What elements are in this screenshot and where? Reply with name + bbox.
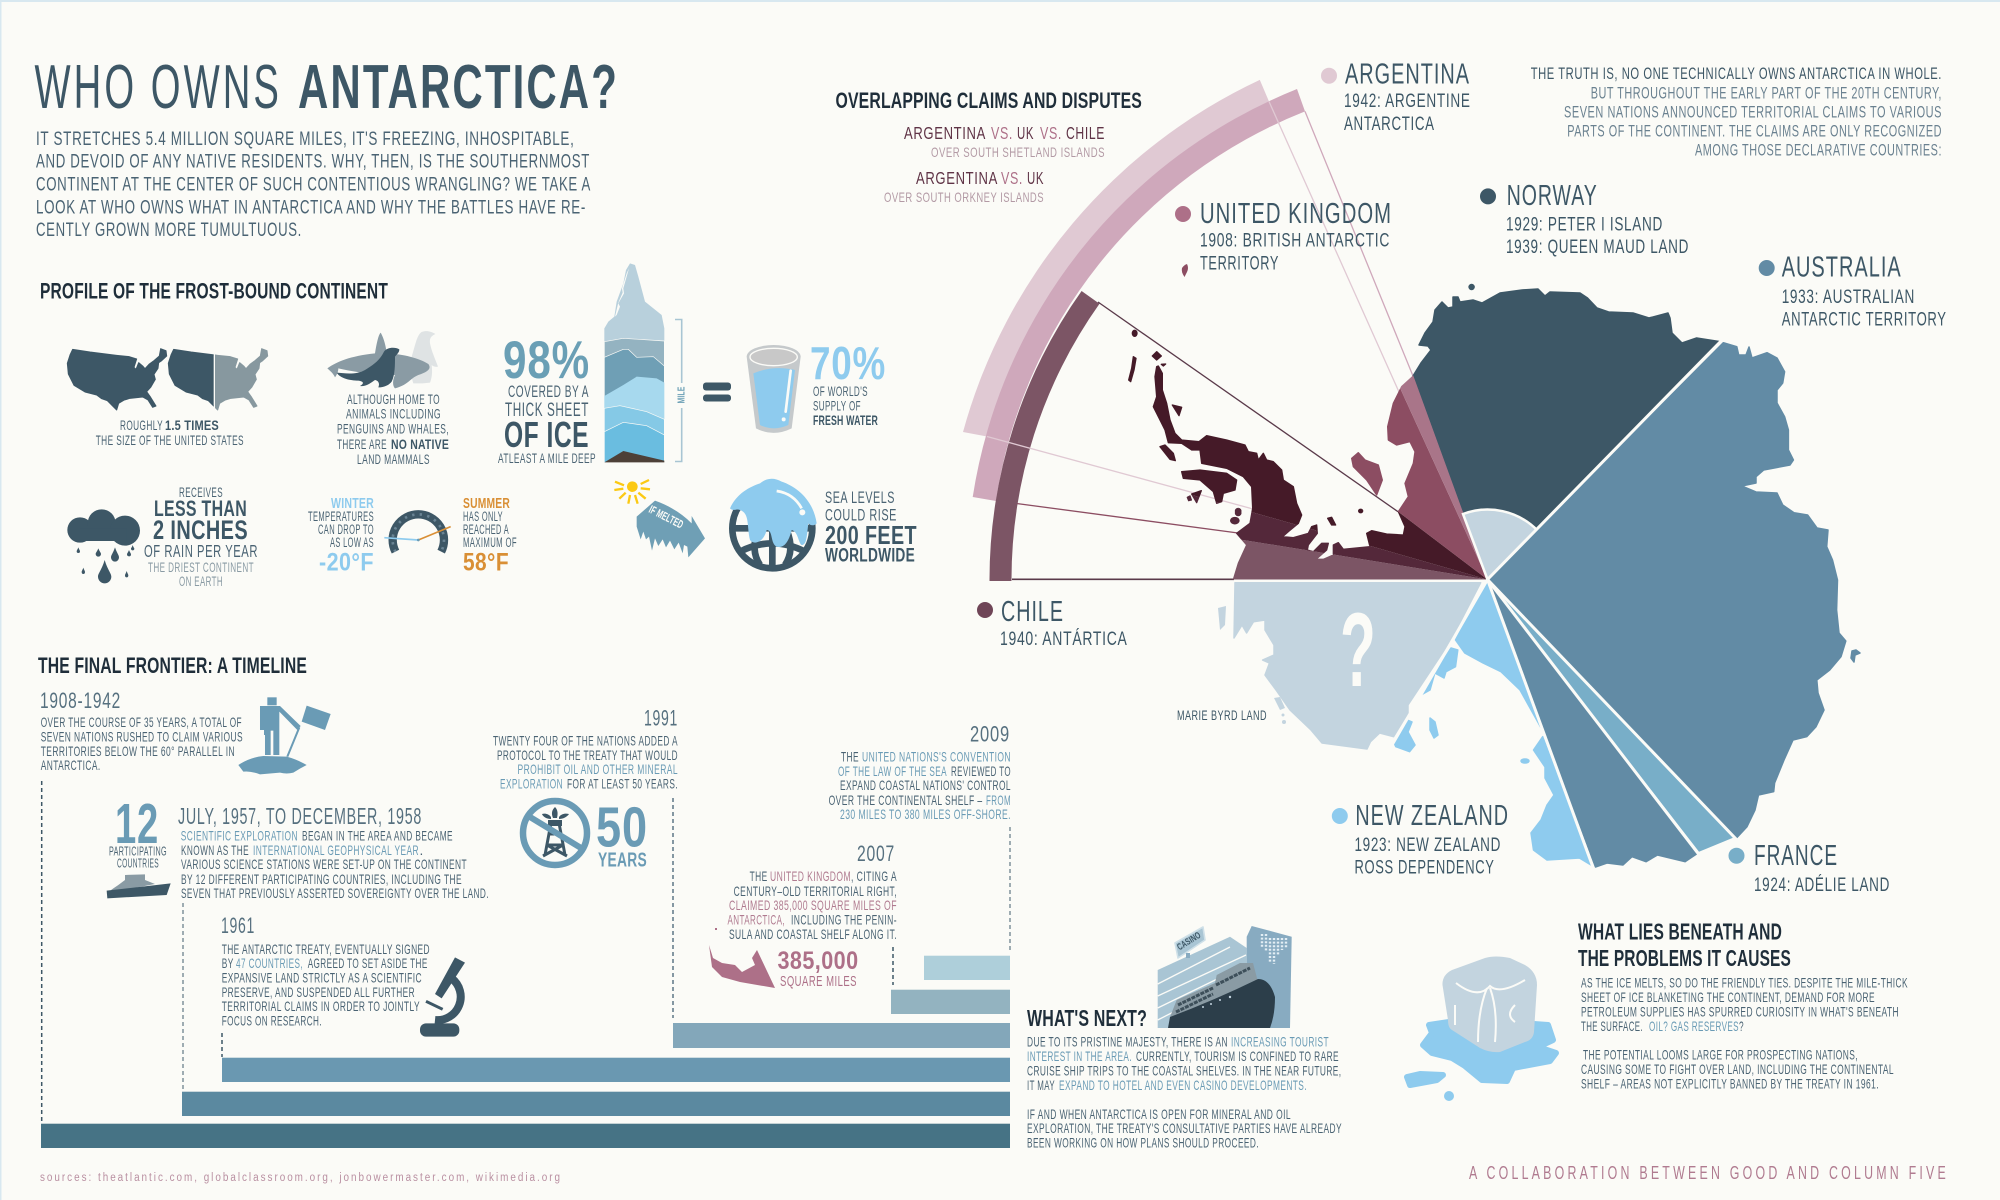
icon: explorer with flag: [238, 697, 331, 774]
stat: 385,000 square miles: [778, 947, 858, 990]
label: Australia: 1933: AUSTRALIAN: [1782, 286, 1915, 308]
dispute: south shetland: [904, 123, 1105, 160]
timeline: 2007: [709, 841, 897, 990]
body text: IF AND WHEN ANTARCTICA IS OPEN FOR MINERAL AND OIL: [1027, 1107, 1291, 1122]
panel: no native land mammals: [327, 331, 449, 467]
heading: timeline: THE FINAL FRONTIER: A TIMELINE: [38, 653, 307, 678]
label: United Kingdom: [1175, 198, 1392, 275]
sea level caption: WORLDWIDE: [825, 545, 915, 567]
body text: CRUISE SHIP TRIPS TO THE COASTAL SHELVES. IN THE NEAR FUTURE,: [1027, 1064, 1342, 1079]
intro text block: [36, 129, 591, 241]
water stat text: 70%: [810, 337, 886, 389]
water stat text: OF WORLD'S: [813, 383, 868, 399]
body text: EXPANSIVE LAND STRICTLY AS A SCIENTIFIC: [222, 971, 422, 986]
ice stat text: OF ICE: [504, 414, 589, 455]
body text: OVER THE CONTINENTAL SHELF –: [829, 793, 983, 808]
body text: [1581, 976, 1908, 1092]
icon: microscope: [420, 957, 465, 1037]
water stat text: SUPPLY OF: [813, 398, 861, 414]
label: New Zealand: 1923: NEW ZEALAND: [1354, 834, 1501, 856]
heading: overlapping claims: OVERLAPPING CLAIMS AND DISPUTES: [836, 88, 1142, 113]
illustration: casino and cruise ship: CASINO: [1175, 930, 1203, 953]
icon: melting ice cube: [1407, 956, 1556, 1101]
summer text: SUMMER: [463, 495, 510, 512]
body text: INCLUDING THE PENIN-: [791, 913, 897, 928]
body text: SULA AND COASTAL SHELF ALONG IT.: [729, 927, 897, 942]
winter text: TEMPERATURES: [308, 509, 374, 524]
summer text: REACHED A: [463, 522, 509, 537]
label: Argentina: ARGENTINA: [1345, 59, 1470, 91]
heading: what lies beneath: THE PROBLEMS IT CAUSES: [1578, 945, 1791, 971]
chart: claim arcs: [963, 80, 1413, 581]
label: Argentina: [1321, 59, 1471, 135]
dispute: south shetland: ARGENTINA: [904, 123, 986, 143]
size caption: THE SIZE OF THE UNITED STATES: [96, 432, 244, 448]
body text: EXPLORATION, THE TREATY'S CONSULTATIVE PARTIES HAVE ALREADY: [1027, 1121, 1342, 1136]
label: New Zealand: ROSS DEPENDENCY: [1354, 856, 1494, 878]
dispute: south shetland: CHILE: [1066, 123, 1105, 143]
intro text block: CENTLY GROWN MORE TUMULTUOUS.: [36, 220, 302, 241]
body text: EXPAND COASTAL NATIONS' CONTROL: [840, 778, 1011, 793]
label: Marie Byrd Land: MARIE BYRD LAND: [1177, 708, 1267, 723]
mammals caption: NO NATIVE: [391, 436, 449, 452]
size caption: [96, 417, 244, 448]
body text: [222, 942, 430, 1029]
rainfall caption: 2 INCHES: [153, 515, 248, 545]
timeline bars: [41, 956, 1010, 1148]
label: Norway: 1939: QUEEN MAUD LAND: [1506, 236, 1689, 258]
body text: BEEN WORKING ON HOW PLANS SHOULD PROCEED.: [1027, 1136, 1259, 1151]
mammals caption: ALTHOUGH HOME TO: [347, 391, 440, 407]
body text: THE: [750, 869, 768, 884]
panel: if melted: [614, 479, 917, 568]
timeline: 1957-1958: [107, 792, 489, 901]
body text: OIL? GAS RESERVES: [1649, 1019, 1739, 1034]
body text: CENTURY–OLD TERRITORIAL RIGHT,: [734, 884, 897, 899]
map: Antarctica sectors: [1129, 264, 1860, 870]
label: Chile: CHILE: [1001, 596, 1064, 628]
arc: United Kingdom: [973, 89, 1305, 501]
intro text block: LOOK AT WHO OWNS WHAT IN ANTARCTICA AND WHY THE BATTLES HAVE RE-: [36, 197, 586, 218]
ice stat text: 98%: [503, 331, 590, 390]
mammals caption: ANIMALS INCLUDING: [346, 406, 441, 422]
panel: what's next: [1027, 926, 1342, 1151]
icon: UK claim map: [709, 928, 775, 988]
mammals caption: LAND MAMMALS: [357, 451, 430, 467]
sector: Australia: [1488, 343, 1860, 867]
body text: CURRENTLY, TOURISM IS CONFINED TO RARE: [1136, 1049, 1339, 1064]
intro text block: CONTINENT AT THE CENTER OF SUCH CONTENTIOUS WRANGLING? WE TAKE A: [36, 175, 591, 196]
icon: rain cloud: [67, 509, 140, 583]
timeline: 1961: 1961: [221, 913, 255, 938]
timeline: 2009: [829, 722, 1011, 822]
label: Australia: AUSTRALIA: [1782, 252, 1902, 284]
body text: ANTARCTICA.: [41, 758, 101, 773]
stat: 12 countries: 12: [115, 792, 159, 856]
label: New Zealand: [1332, 800, 1509, 878]
timeline: 1961: [221, 913, 465, 1037]
timeline: 1991: [493, 706, 678, 872]
label: United Kingdom: TERRITORY: [1200, 253, 1279, 275]
panel: ice coverage: [498, 263, 886, 466]
body text: OVER THE COURSE OF 35 YEARS, A TOTAL OF: [41, 715, 242, 730]
body text: AGREED TO SET ASIDE THE: [308, 956, 428, 971]
body text: SEVEN NATIONS RUSHED TO CLAIM VARIOUS: [41, 730, 243, 745]
label: Chile: [977, 596, 1128, 650]
icon: orca, seal, penguin: [327, 331, 438, 388]
winter text: -20°F: [319, 549, 374, 577]
water stat text: [810, 337, 886, 428]
title: ANTARCTICA?: [298, 53, 619, 122]
body text: OF THE LAW OF THE SEA: [838, 764, 947, 779]
rainfall caption: THE DRIEST CONTINENT: [148, 559, 254, 575]
body text: THE ANTARCTIC TREATY, EVENTUALLY SIGNED: [222, 942, 430, 957]
label: Norway: NORWAY: [1507, 180, 1598, 212]
text block: the truth: [1531, 64, 1942, 160]
body text: INTEREST IN THE AREA.: [1027, 1049, 1132, 1064]
body text: TWENTY FOUR OF THE NATIONS ADDED A: [493, 734, 678, 749]
stat: 385,000 square miles: SQUARE MILES: [780, 973, 857, 990]
timeline dashed connectors: [42, 781, 1010, 1123]
sources: sources: theatlantic.com, globalclassroom.org, jonbowermaster.com, wikimedia.org: [40, 1172, 562, 1184]
dispute: south orkney: ARGENTINA: [916, 168, 998, 188]
body text: PRESERVE, AND SUSPENDED ALL FURTHER: [222, 985, 415, 1000]
body text: EXPLORATION: [500, 777, 563, 792]
body text: FROM: [986, 793, 1011, 808]
dispute: south shetland: VS.: [1040, 123, 1062, 143]
timeline: 1957-1958: JULY, 1957, TO DECEMBER, 1958: [178, 803, 422, 829]
body text: SEVEN THAT PREVIOUSLY ASSERTED SOVEREIGNTY OVER THE LAND.: [181, 886, 489, 901]
body text: TERRITORIAL CLAIMS IN ORDER TO JOINTLY: [222, 999, 420, 1014]
dispute: south shetland: OVER SOUTH SHETLAND ISLANDS: [931, 144, 1105, 160]
body text: INTERNATIONAL GEOPHYSICAL YEAR: [253, 843, 419, 858]
sea level caption: COULD RISE: [825, 506, 897, 525]
question mark: ?: [1340, 592, 1377, 709]
mammals caption: THERE ARE: [337, 436, 387, 452]
intro text block: AND DEVOID OF ANY NATIVE RESIDENTS. WHY, THEN, IS THE SOUTHERNMOST: [36, 152, 590, 173]
label: Chile: 1940: ANTÁRTICA: [1000, 627, 1128, 650]
claim boundary lines: [987, 102, 1413, 579]
dispute: south orkney: [884, 168, 1044, 205]
timeline: 1991: 1991: [644, 706, 678, 731]
title: WHO OWNS: [34, 53, 282, 122]
sector divider lines: [1392, 340, 1737, 870]
label: France: [1728, 840, 1890, 896]
body text: PROHIBIT OIL AND OTHER MINERAL: [518, 762, 678, 777]
body text: 230 MILES TO 380 MILES OFF-SHORE.: [840, 807, 1011, 822]
sea level caption: [825, 488, 917, 567]
icon: no oil derrick: [523, 801, 587, 865]
stat: 12 countries: [109, 792, 167, 871]
label: United Kingdom: 1908: BRITISH ANTARCTIC: [1200, 229, 1390, 251]
body text: BEGAN IN THE AREA AND BECAME: [302, 829, 453, 844]
body text: [829, 750, 1011, 822]
label: Norway: 1929: PETER I ISLAND: [1506, 214, 1663, 236]
rainfall caption: ON EARTH: [179, 573, 223, 589]
body text: INCREASING TOURIST: [1231, 1035, 1329, 1050]
body text: THE SURFACE.: [1581, 1019, 1643, 1034]
water stat text: FRESH WATER: [813, 412, 878, 428]
body text: [181, 829, 489, 901]
mammals caption: PENGUINS AND WHALES,: [337, 420, 449, 436]
dispute: south orkney: OVER SOUTH ORKNEY ISLANDS: [884, 189, 1044, 205]
icon: water glass: [747, 345, 801, 433]
island: South Georgia: [1182, 264, 1188, 277]
icon: melting globe: [730, 479, 817, 568]
body text: FOR AT LEAST 50 YEARS.: [567, 777, 678, 792]
body text: UNITED NATIONS'S CONVENTION: [862, 750, 1011, 765]
stat: 50 years: 50: [596, 796, 648, 860]
sector: France: [1488, 580, 1733, 852]
rainfall caption: OF RAIN PER YEAR: [144, 541, 258, 561]
body text: SCIENTIFIC EXPLORATION: [181, 829, 298, 844]
heading: profile: PROFILE OF THE FROST-BOUND CONTINENT: [40, 278, 388, 304]
winter text: CAN DROP TO: [318, 522, 374, 537]
timeline: 1908-1942: [40, 688, 331, 774]
dispute: south orkney: UK: [1027, 168, 1044, 188]
sector: polar unclaimed dome: [1463, 510, 1538, 580]
arrow: if melted: IF MELTED: [647, 504, 685, 531]
intro text block: IT STRETCHES 5.4 MILLION SQUARE MILES, IT'S FREEZING, INHOSPITABLE,: [36, 129, 574, 150]
label: France: FRANCE: [1754, 840, 1838, 872]
body text: , CITING A: [851, 869, 897, 884]
body text: ANTARCTICA,: [728, 913, 785, 928]
body text: BY: [222, 956, 234, 971]
body text: FOCUS ON RESEARCH.: [222, 1014, 322, 1029]
sector: New Zealand: [1394, 580, 1591, 865]
winter text: AS LOW AS: [330, 535, 374, 550]
size caption: 1.5 TIMES: [165, 417, 219, 433]
dispute: south shetland: UK: [1017, 123, 1034, 143]
dispute: south shetland: VS.: [991, 123, 1013, 143]
title: [34, 53, 619, 122]
winter text: [308, 495, 374, 577]
summer text: HAS ONLY: [463, 509, 503, 524]
heading: what lies beneath: [1578, 918, 1791, 971]
label: Norway: [1480, 180, 1689, 258]
body text: BY 12 DIFFERENT PARTICIPATING COUNTRIES, INCLUDING THE: [181, 872, 462, 887]
body text: 47 COUNTRIES,: [236, 956, 303, 971]
label: Argentina: ANTARCTICA: [1344, 113, 1435, 135]
mile bracket: MILE: [676, 386, 688, 404]
body text: IT MAY: [1027, 1078, 1055, 1093]
body text: VARIOUS SCIENCE STATIONS WERE SET-UP ON THE CONTINENT: [181, 857, 467, 872]
icon: US maps: [67, 349, 268, 410]
body text: EXPAND TO HOTEL AND EVEN CASINO DEVELOPMENTS.: [1059, 1078, 1307, 1093]
sector: Chile, UK, Argentina overlap land: [1129, 330, 1487, 580]
stat: 12 countries: PARTICIPATING: [109, 845, 167, 859]
gauge: [384, 514, 451, 552]
ice stat text: THICK SHEET: [505, 400, 589, 421]
panel: size comparison: [67, 349, 268, 448]
body text: CLAIMED 385,000 SQUARE MILES OF: [729, 898, 897, 913]
panel: what lies beneath: [1407, 918, 1908, 1101]
ice stat text: COVERED BY A: [508, 382, 589, 401]
body text: [41, 715, 243, 773]
panel: overlapping claims text: [836, 88, 1142, 205]
stat: 12 countries: COUNTRIES: [117, 857, 159, 871]
label: Australia: [1759, 252, 1947, 331]
sea level caption: 200 FEET: [825, 520, 917, 550]
mile bracket: [675, 320, 688, 462]
equals sign: [703, 382, 731, 402]
body text: TERRITORIES BELOW THE 60° PARALLEL IN: [41, 744, 235, 759]
label: France: 1924: ADÉLIE LAND: [1754, 873, 1890, 896]
sea level caption: SEA LEVELS: [825, 488, 895, 507]
winter text: WINTER: [331, 495, 374, 512]
dispute: south orkney: VS.: [1001, 168, 1023, 188]
body text: ?: [1739, 1019, 1744, 1034]
panel: temperature: [308, 495, 517, 577]
icon: ship: [107, 874, 171, 898]
timeline: 2007: 2007: [857, 841, 895, 866]
body text: [493, 734, 678, 792]
ice stat text: ATLEAST A MILE DEEP: [498, 450, 596, 466]
ice stat text: [498, 331, 596, 466]
stat: 50 years: YEARS: [598, 850, 647, 872]
stat: 50 years: [596, 796, 648, 872]
rainfall caption: [144, 484, 258, 589]
sector: Marie Byrd Land: [1218, 583, 1481, 749]
timeline: 2009: 2009: [970, 722, 1010, 747]
icon: sun: [614, 480, 650, 504]
body text: KNOWN AS THE: [181, 843, 249, 858]
body text: PROTOCOL TO THE TREATY THAT WOULD: [497, 748, 678, 763]
label: New Zealand: NEW ZEALAND: [1355, 800, 1509, 832]
summer text: [463, 495, 517, 577]
mammals caption: [337, 391, 449, 467]
body text: [1027, 1035, 1342, 1151]
label: Argentina: 1942: ARGENTINE: [1344, 90, 1471, 112]
body text: [728, 869, 897, 942]
stat: 385,000 square miles: 385,000: [778, 947, 858, 975]
body text: DUE TO ITS PRISTINE MAJESTY, THERE IS AN: [1027, 1035, 1228, 1050]
sector: Norway: [1413, 284, 1721, 580]
size caption: ROUGHLY: [120, 417, 163, 433]
body text: UNITED KINGDOM: [770, 869, 851, 884]
timeline: 1908-1942: 1908-1942: [40, 688, 121, 713]
heading: what's next: WHAT'S NEXT?: [1027, 1005, 1147, 1031]
summer text: 58°F: [463, 549, 509, 577]
body text: REVIEWED TO: [951, 764, 1011, 779]
panel: rainfall: [67, 484, 258, 589]
rainfall caption: LESS THAN: [154, 496, 247, 521]
rainfall caption: RECEIVES: [179, 484, 223, 500]
heading: what lies beneath: WHAT LIES BENEATH AND: [1578, 918, 1782, 944]
arc: Chile: [990, 291, 1100, 581]
body text: THE: [841, 750, 859, 765]
arc: Argentina: [963, 80, 1269, 437]
summer text: MAXIMUM OF: [463, 535, 517, 550]
icon: ice column: [604, 263, 664, 462]
label: United Kingdom: UNITED KINGDOM: [1200, 198, 1392, 230]
body text: .: [420, 843, 424, 858]
arrow: if melted: [637, 501, 705, 557]
illustration: casino and cruise ship: [1158, 926, 1292, 1028]
